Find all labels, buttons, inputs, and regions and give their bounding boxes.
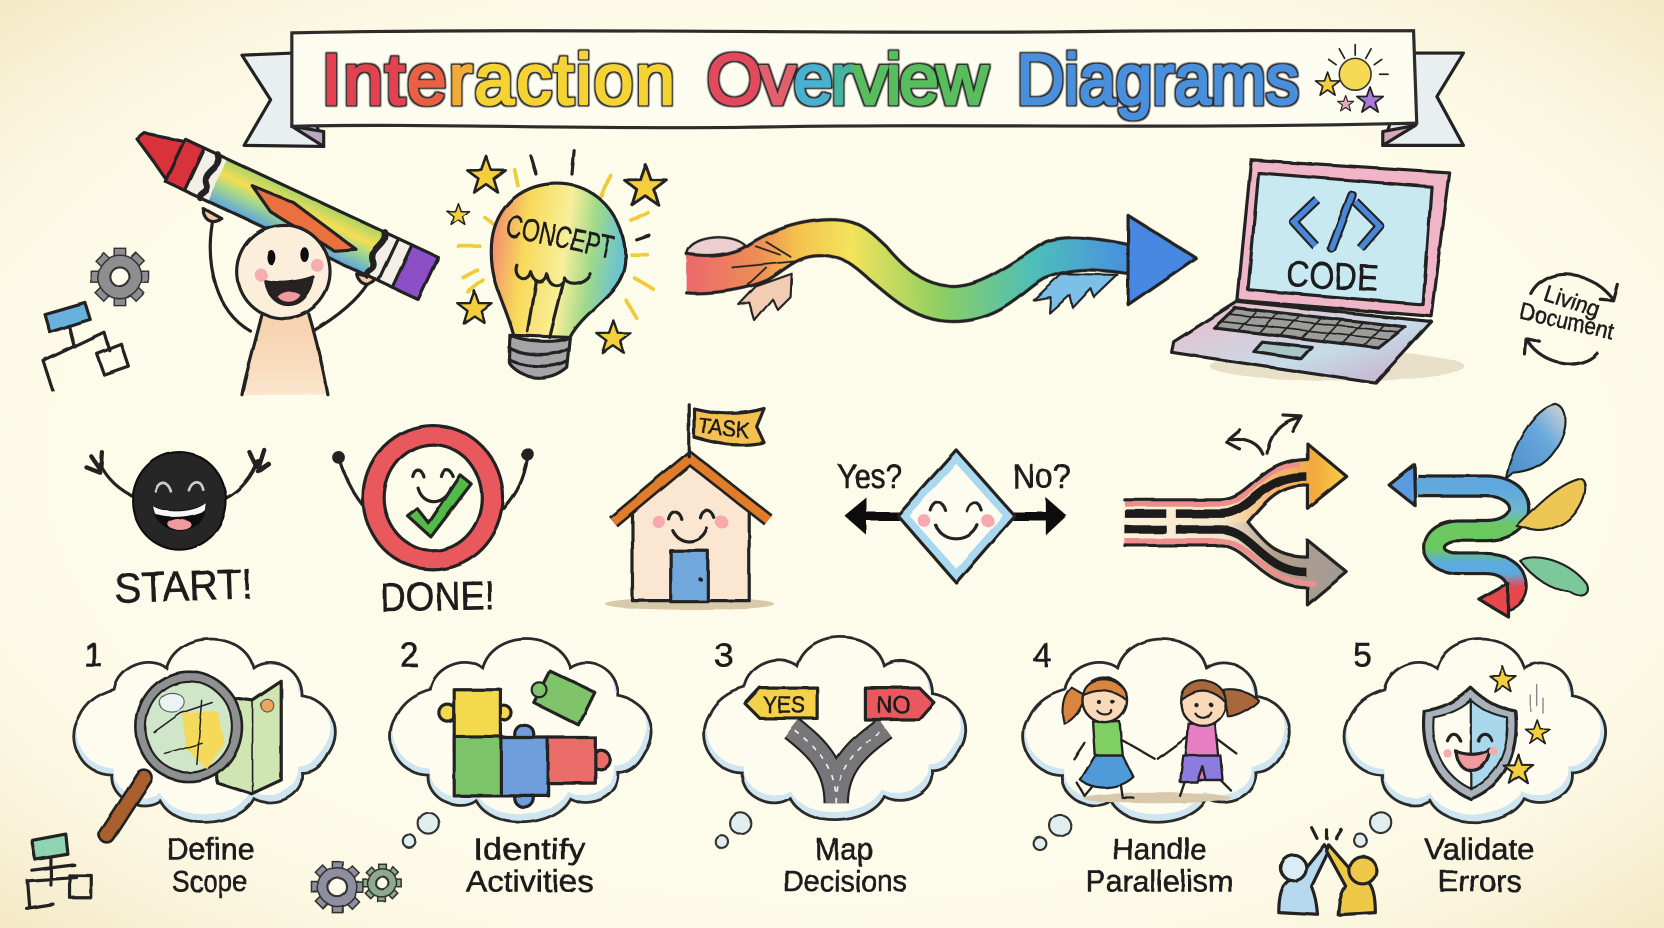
banner right tail bbox=[1383, 53, 1463, 145]
start label: START! bbox=[114, 560, 253, 612]
pink edge stripes bbox=[1125, 465, 1316, 584]
black ball bbox=[133, 452, 226, 550]
wave band outline bbox=[687, 220, 1131, 322]
filament bbox=[516, 265, 590, 337]
thought bubbles bbox=[1354, 812, 1391, 847]
step 4 handle parallelism bbox=[1023, 636, 1290, 898]
cycle arrows bbox=[1525, 274, 1617, 364]
smile bbox=[413, 470, 453, 502]
banner main strip bbox=[292, 31, 1417, 128]
label: Map bbox=[815, 832, 873, 867]
shield bbox=[1424, 688, 1516, 799]
diamond inner bbox=[909, 464, 1003, 569]
head bbox=[237, 225, 330, 318]
inner circle bbox=[384, 445, 482, 551]
body bbox=[242, 314, 328, 395]
icon: small flowchart bbox=[44, 302, 128, 391]
ground shadow bbox=[1082, 793, 1231, 803]
stars bbox=[1490, 666, 1550, 783]
label bbox=[1424, 832, 1535, 898]
black top rays bbox=[531, 151, 649, 240]
screw base bbox=[509, 335, 570, 378]
cloud 5 bbox=[1344, 636, 1606, 822]
step 2 identify activities bbox=[390, 636, 652, 898]
task house bbox=[605, 404, 775, 610]
left head bbox=[1389, 465, 1416, 506]
yellow feather bbox=[1516, 479, 1585, 530]
map pin bbox=[261, 699, 274, 712]
number 4: 4 bbox=[1033, 636, 1051, 674]
label bbox=[466, 832, 593, 898]
puzzle bbox=[439, 671, 610, 808]
door knob bbox=[698, 577, 703, 582]
label: Define bbox=[167, 832, 255, 867]
door bbox=[671, 551, 708, 602]
figure holding giant crayon bbox=[126, 121, 438, 395]
screen bbox=[1248, 173, 1432, 305]
cloud 4 bbox=[1023, 636, 1290, 822]
label: Parallelism bbox=[1086, 863, 1233, 898]
number 5: 5 bbox=[1353, 636, 1372, 674]
house wall bbox=[632, 465, 749, 601]
icon: high five bbox=[1279, 828, 1376, 915]
thought bubbles bbox=[403, 813, 439, 848]
roof colour bbox=[613, 458, 768, 522]
no label: No? bbox=[1012, 458, 1071, 496]
arms and hands bbox=[86, 450, 268, 499]
icon: gear bbox=[91, 248, 149, 306]
banner left tail bbox=[242, 53, 324, 146]
feather vein bbox=[732, 242, 798, 284]
diamond bbox=[898, 450, 1015, 583]
cloud 2 bbox=[390, 636, 652, 822]
rays bbox=[458, 170, 653, 318]
icon: twin gears bbox=[312, 862, 401, 913]
roof outline bbox=[613, 458, 768, 522]
yes label: Yes? bbox=[837, 458, 902, 496]
code label: CODE bbox=[1285, 252, 1380, 299]
laptop base bbox=[1172, 301, 1432, 383]
living label: Living bbox=[1541, 280, 1603, 322]
step 3 map decisions bbox=[704, 634, 966, 898]
girl one bbox=[1063, 678, 1155, 798]
label: Activities bbox=[466, 863, 593, 898]
right arrow bbox=[1015, 501, 1064, 532]
cloud 3 bbox=[704, 634, 966, 820]
title text: Overview bbox=[707, 41, 989, 120]
feathered s arrow bbox=[1389, 404, 1588, 617]
lower branch fill bbox=[1123, 522, 1347, 605]
label bbox=[783, 832, 907, 898]
cloud 1 bbox=[74, 636, 335, 822]
trackpad bbox=[1253, 342, 1312, 359]
done node bbox=[332, 426, 534, 620]
label: Scope bbox=[172, 863, 247, 898]
laptop with code bbox=[1172, 160, 1464, 383]
fork outline bbox=[1125, 444, 1347, 605]
done label: DONE! bbox=[380, 572, 495, 620]
ground shadow bbox=[605, 597, 775, 610]
number 1: 1 bbox=[84, 636, 103, 674]
parallel fork arrow bbox=[1123, 415, 1347, 605]
label: Handle bbox=[1112, 832, 1207, 867]
rainbow wavy arrow bbox=[687, 215, 1196, 322]
hands bbox=[203, 208, 377, 284]
shadow bbox=[1210, 351, 1464, 381]
label: Identify bbox=[473, 832, 586, 867]
keyboard bbox=[1214, 308, 1405, 348]
body outline bbox=[242, 314, 328, 395]
house face bbox=[653, 511, 728, 541]
label: Errors bbox=[1438, 863, 1522, 898]
bulb glass bbox=[491, 184, 625, 337]
thought bubbles bbox=[1034, 815, 1071, 850]
tail pink lobe bbox=[687, 237, 746, 256]
map bbox=[212, 681, 281, 794]
fork core lines bbox=[1125, 476, 1306, 572]
task label: TASK bbox=[697, 413, 750, 443]
map fold bbox=[252, 700, 254, 794]
task flag bbox=[694, 409, 764, 445]
decision diamond bbox=[837, 450, 1071, 583]
code symbol bbox=[1294, 195, 1380, 248]
label: Decisions bbox=[783, 863, 907, 898]
title text: Interaction bbox=[322, 41, 675, 120]
upper branch fill bbox=[1123, 444, 1347, 522]
title text: Diagrams bbox=[1017, 41, 1299, 120]
blue feather bbox=[1034, 274, 1117, 313]
banner left fold bbox=[292, 126, 324, 146]
living document cycle bbox=[1518, 274, 1617, 364]
girl two bbox=[1158, 681, 1259, 796]
s arrow outline bbox=[1418, 486, 1519, 601]
title banner bbox=[242, 31, 1463, 146]
green feather bbox=[1520, 557, 1588, 596]
icon: sun and stars bbox=[1315, 45, 1388, 112]
number 2: 2 bbox=[400, 636, 419, 674]
stars bbox=[447, 156, 666, 353]
magnifier handle bbox=[107, 778, 144, 835]
red ring bbox=[363, 426, 503, 570]
label: Validate bbox=[1424, 832, 1535, 867]
yes label: YES bbox=[763, 692, 805, 719]
label bbox=[1086, 832, 1233, 898]
banner right fold bbox=[1383, 125, 1416, 145]
thought bubbles bbox=[715, 813, 751, 848]
document label: Document bbox=[1518, 298, 1617, 345]
arms bbox=[340, 458, 527, 509]
tail peach feather bbox=[739, 274, 792, 320]
lightbulb concept bbox=[447, 151, 666, 378]
blue feather bbox=[1506, 404, 1566, 479]
icon: bottom flowchart bbox=[27, 834, 91, 908]
face bbox=[255, 247, 324, 305]
flag pole bbox=[687, 404, 690, 456]
concept label: CONCEPT bbox=[503, 208, 617, 265]
small curved arrows bbox=[1226, 415, 1301, 454]
step 5 validate errors bbox=[1344, 636, 1606, 898]
step 1 define scope bbox=[74, 636, 335, 898]
s arrow colour bbox=[1414, 486, 1519, 601]
hands bbox=[332, 448, 534, 464]
number 3: 3 bbox=[714, 636, 733, 674]
happy face bbox=[152, 482, 207, 531]
wave band colour bbox=[687, 220, 1131, 322]
diamond face bbox=[918, 502, 994, 539]
arms bbox=[210, 218, 367, 331]
giant crayon bbox=[126, 121, 438, 299]
magnifier lens bbox=[136, 672, 242, 782]
check mark bbox=[408, 475, 471, 537]
yes sign bbox=[745, 688, 817, 718]
title text bbox=[322, 41, 1299, 120]
handle colour bbox=[107, 778, 144, 835]
label bbox=[167, 832, 255, 898]
forked road bbox=[792, 728, 885, 803]
lid bbox=[1237, 160, 1450, 316]
no sign bbox=[865, 688, 934, 719]
left arrow bbox=[847, 501, 898, 532]
no label: NO bbox=[877, 692, 911, 719]
bottom head bbox=[1479, 584, 1508, 617]
start node bbox=[86, 450, 268, 612]
arrow head bbox=[1128, 215, 1196, 305]
